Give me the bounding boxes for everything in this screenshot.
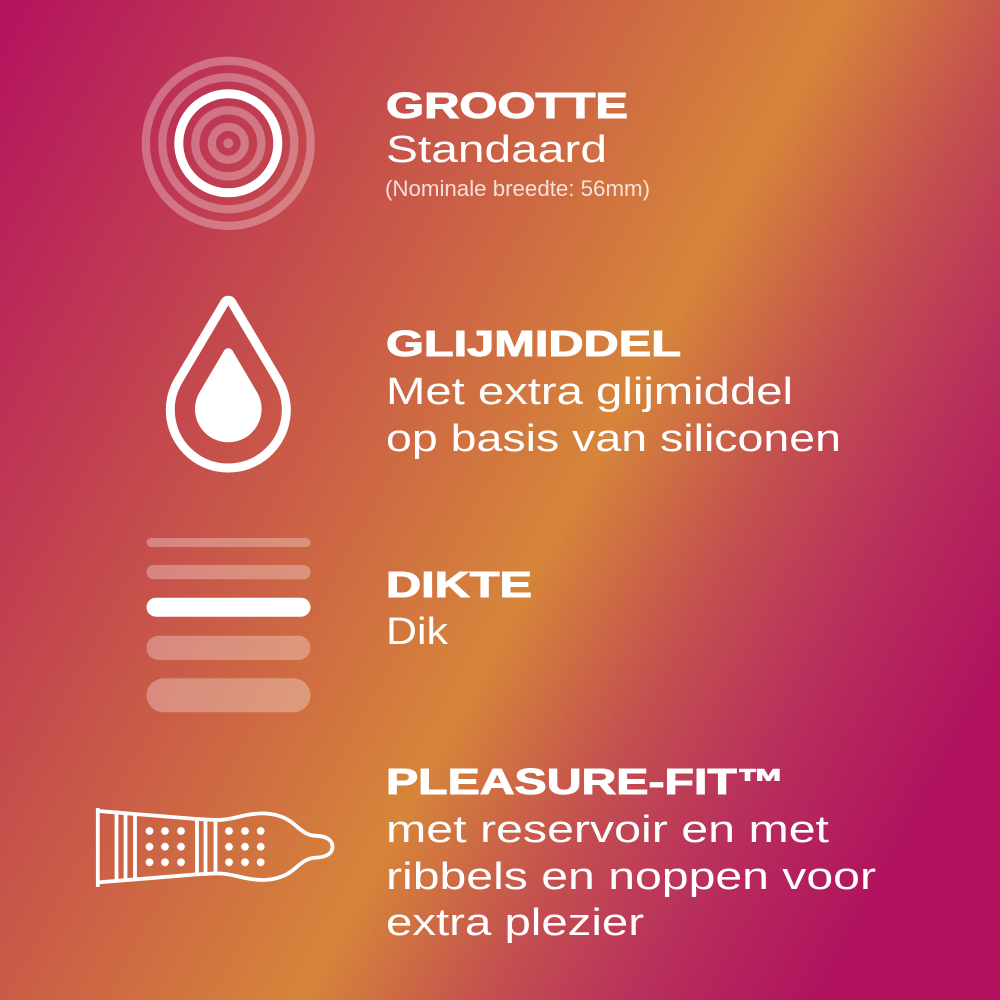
value: dik: Dik: [386, 611, 449, 653]
icon: lubricant drop: [170, 300, 286, 468]
condom outline: [98, 811, 332, 882]
heading: pleasure-fit: PLEASURE-FIT™: [386, 761, 785, 802]
icon: thickness bars: [146, 538, 310, 712]
drop outline: [170, 300, 286, 468]
dots: [146, 827, 265, 866]
heading: glijmiddel: GLIJMIDDEL: [386, 323, 681, 364]
text block: grootte: [385, 85, 650, 201]
heading: grootte: GROOTTE: [386, 85, 628, 126]
heading: dikte: DIKTE: [386, 564, 532, 605]
text block: dikte: [386, 564, 532, 653]
description line 2: ribbels en noppen voor: [386, 856, 876, 898]
description line 1: met reservoir en met: [386, 809, 830, 851]
value line 2: op basis van siliconen: [386, 418, 841, 460]
drop fill: [195, 348, 262, 442]
text block: glijmiddel: [386, 323, 841, 460]
description line 3: extra plezier: [386, 902, 644, 944]
text block: pleasure-fit: [386, 761, 876, 944]
icon: concentric rings (size): [146, 61, 311, 226]
ribs: [98, 808, 216, 887]
value: standaard: Standaard: [386, 129, 607, 171]
note: nominale breedte: (Nominale breedte: 56mm): [385, 176, 650, 201]
icon: condom with ribs and dots: [98, 808, 332, 887]
value line 1: Met extra glijmiddel: [386, 371, 793, 413]
